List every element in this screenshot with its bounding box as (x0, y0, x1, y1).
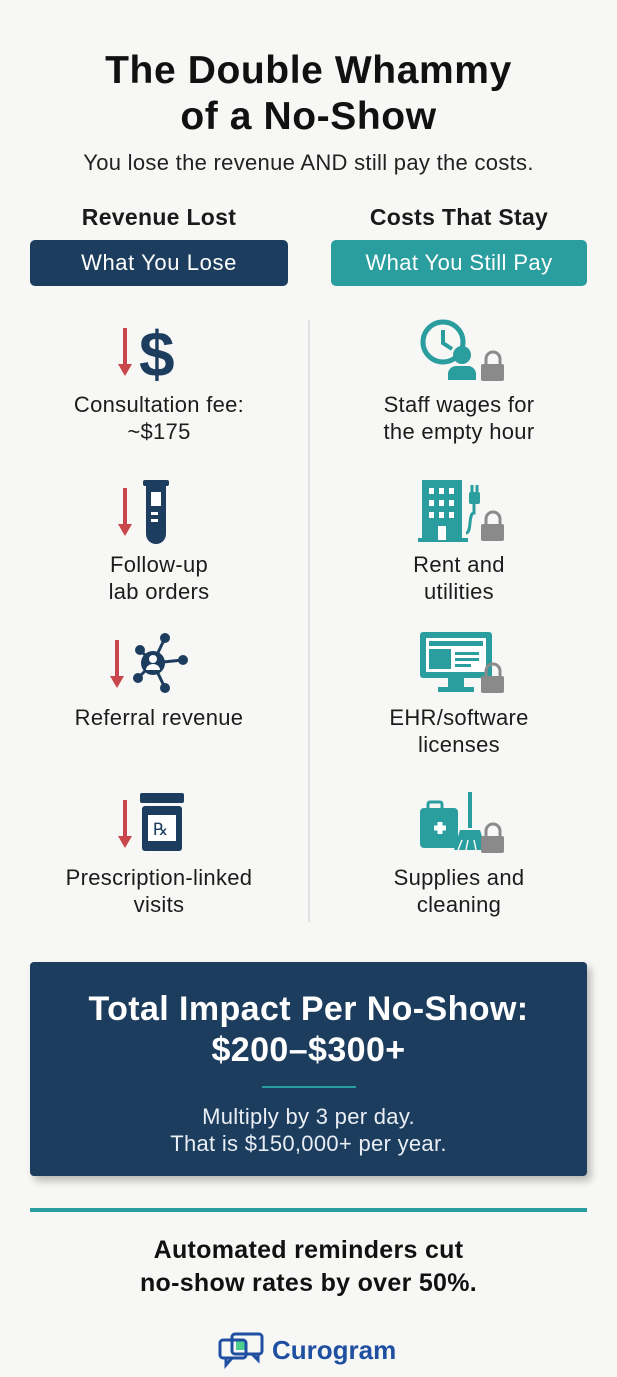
text: referral revenue: Referral revenue (75, 705, 243, 730)
text: EHR licenses: EHR/software (389, 705, 529, 730)
text: EHR licenses (389, 705, 529, 757)
text: prescription-linked visits: Prescription-linked (66, 865, 252, 890)
text: supplies and cleaning (394, 865, 524, 917)
text: follow-up lab orders: lab orders (109, 579, 209, 604)
icon: dollar down (118, 318, 175, 384)
icon: rx bottle down: ℞ (153, 820, 168, 839)
panel: total impact (30, 962, 587, 1176)
text: EHR licenses: licenses (418, 732, 500, 757)
title: The Double Whammy (105, 49, 512, 92)
logo: curogram: Curogram (272, 1335, 396, 1365)
icon: building plug lock (418, 480, 504, 542)
text: supplies and cleaning: cleaning (417, 892, 501, 917)
text: multiply: Multiply by 3 per day. (202, 1104, 415, 1129)
title: of a No-Show (180, 95, 437, 138)
text: staff wages: the empty hour (384, 419, 534, 444)
logo: curogram (218, 1332, 396, 1369)
text: consultation fee: Consultation fee: (74, 392, 244, 417)
text: consultation fee: ~$175 (127, 419, 191, 444)
callout: automated reminders: no-show rates by over 50%. (140, 1269, 477, 1297)
heading: total impact: Total Impact Per No-Show: (88, 990, 529, 1028)
icon: referral network down (110, 633, 188, 693)
pill: what you still pay (331, 240, 587, 286)
icon: computer lock (420, 632, 504, 693)
pill: what you lose: What You Lose (81, 250, 237, 275)
text: staff wages (384, 392, 534, 444)
callout: automated reminders (140, 1236, 477, 1297)
text: multiply (170, 1104, 447, 1156)
callout: automated reminders: Automated reminders cut (154, 1236, 463, 1264)
icon: medkit broom lock (420, 792, 504, 853)
text: rent and utilities: Rent and (413, 552, 505, 577)
text: supplies and cleaning: Supplies and (394, 865, 524, 890)
text: rent and utilities: utilities (424, 579, 494, 604)
icon: rx bottle down (118, 793, 184, 851)
text: follow-up lab orders: Follow-up (110, 552, 208, 577)
text: prescription-linked visits: visits (134, 892, 184, 917)
pill: what you lose (30, 240, 288, 286)
text: staff wages: Staff wages for (384, 392, 534, 417)
subtitle: You lose the revenue AND still pay the costs. (83, 150, 534, 175)
text: follow-up lab orders (109, 552, 209, 604)
text: rent and utilities (413, 552, 505, 604)
heading: costs that stay: Costs That Stay (370, 204, 548, 230)
heading: total impact: $200–$300+ (211, 1031, 406, 1069)
text: consultation fee (74, 392, 244, 444)
heading: total impact (88, 990, 529, 1069)
icon: clock person lock (420, 320, 504, 381)
heading: revenue lost: Revenue Lost (82, 204, 236, 230)
text: prescription-linked visits (66, 865, 252, 917)
title (105, 49, 512, 138)
text: multiply: That is $150,000+ per year. (170, 1131, 447, 1156)
pill: what you still pay: What You Still Pay (366, 250, 552, 275)
icon: test tube down (118, 480, 169, 544)
